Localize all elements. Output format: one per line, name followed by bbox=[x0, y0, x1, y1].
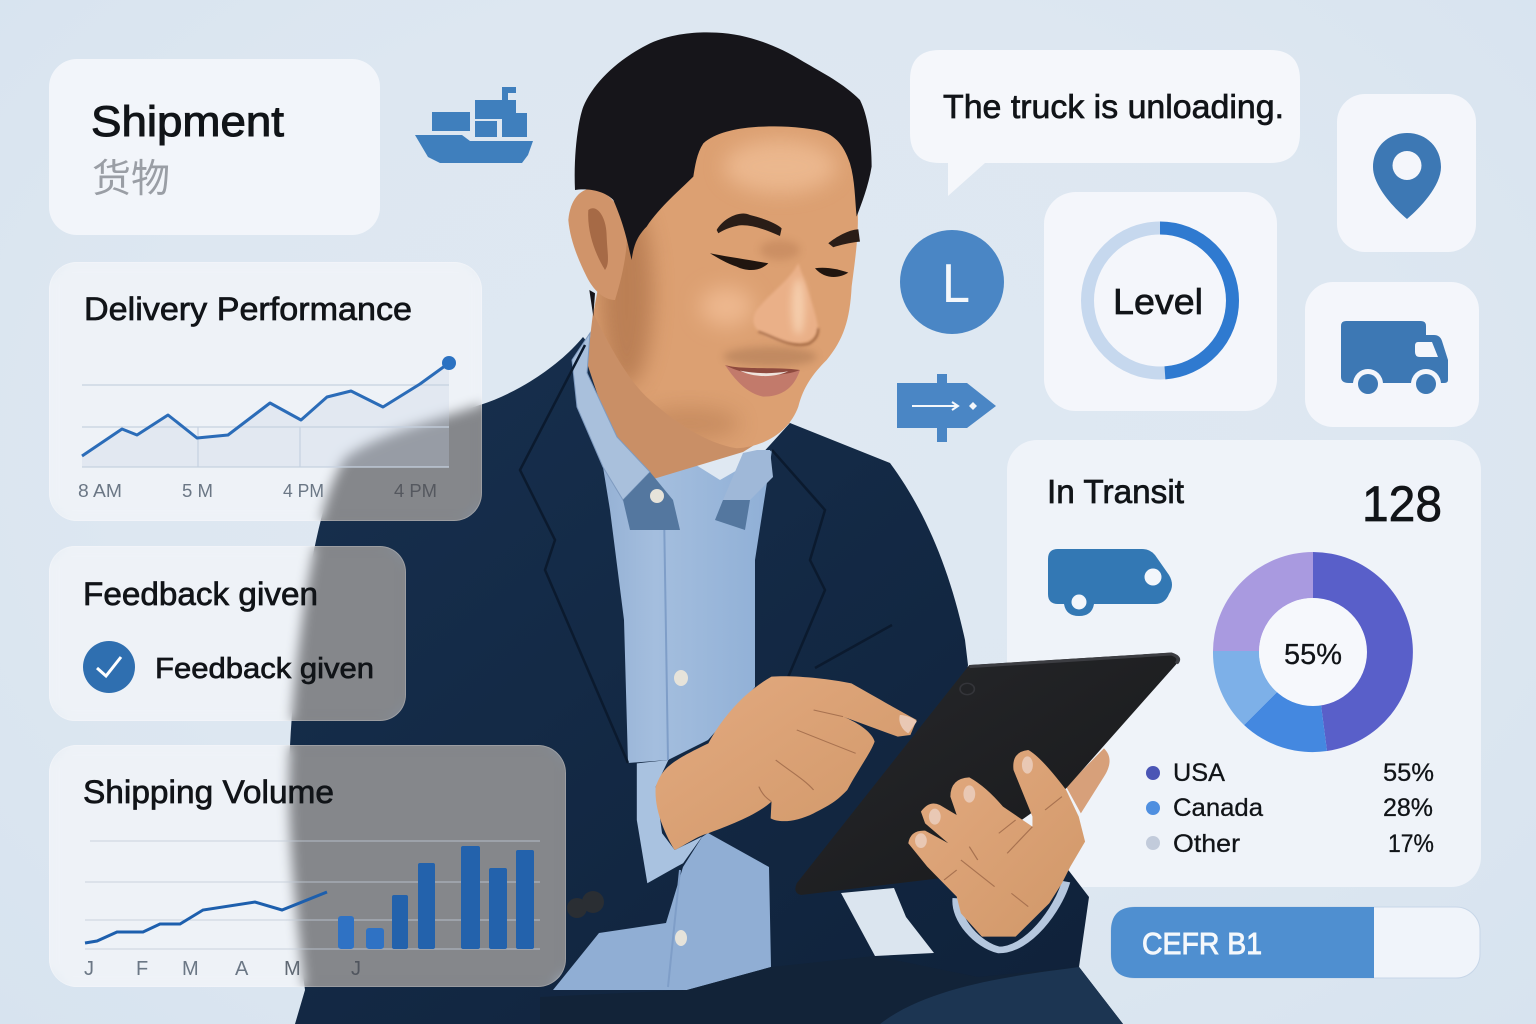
legend: Other bbox=[1173, 830, 1240, 858]
shirt placket bbox=[664, 510, 680, 987]
eyes bbox=[710, 253, 768, 270]
chart title: Delivery Performance bbox=[84, 291, 412, 327]
level text: Level bbox=[1113, 281, 1203, 322]
legend: 55% bbox=[1383, 759, 1434, 787]
month labels: M bbox=[182, 958, 199, 980]
panel: feedback given bbox=[49, 546, 406, 721]
speech text: The truck is unloading. bbox=[943, 88, 1284, 125]
sideburn below ear bbox=[589, 290, 595, 317]
legend: USA bbox=[1173, 759, 1225, 787]
bar chart bbox=[338, 846, 534, 949]
panel: shipping volume bbox=[49, 745, 566, 987]
month labels: A bbox=[235, 958, 249, 980]
in transit count: 128 bbox=[1362, 476, 1442, 532]
tablet bbox=[795, 653, 1179, 895]
panel: truck bbox=[1305, 282, 1479, 427]
volume title: Shipping Volume bbox=[83, 774, 334, 810]
axis labels: 4 PM bbox=[283, 481, 324, 501]
inner collar shadow bbox=[623, 472, 680, 530]
gap between jacket and arm bbox=[841, 888, 934, 956]
trousers bbox=[540, 956, 1123, 1024]
month labels: M bbox=[284, 958, 301, 980]
upper shirt bbox=[577, 407, 772, 763]
fingernails holding bbox=[915, 756, 1033, 848]
lapel edges bbox=[520, 345, 892, 763]
shipment title: Shipment bbox=[91, 98, 284, 146]
level ring bbox=[1088, 228, 1232, 373]
icon: tag truck bbox=[1048, 549, 1172, 616]
icon: delivery truck bbox=[1341, 321, 1448, 399]
collar left bbox=[572, 333, 650, 500]
thumb behind tablet bbox=[1066, 748, 1110, 813]
jacket seen through glass bbox=[287, 404, 566, 987]
left sleeve button bbox=[567, 891, 604, 918]
panel: shipment bbox=[49, 59, 380, 235]
in transit title: In Transit bbox=[1047, 473, 1184, 510]
mouth bbox=[725, 365, 800, 397]
finger creases bbox=[944, 797, 1062, 907]
collar right bbox=[723, 450, 773, 500]
left panel underlays bbox=[49, 262, 566, 987]
left cuff bbox=[637, 760, 702, 883]
ear bbox=[568, 188, 627, 300]
panel: location pin bbox=[1337, 94, 1476, 252]
progress bar: CEFR B1 bbox=[1111, 907, 1480, 978]
icon: signpost bbox=[897, 374, 996, 442]
lower shirt bbox=[553, 833, 771, 990]
chinese subtitle: 货物 bbox=[92, 158, 170, 201]
feedback heading: Feedback given bbox=[83, 576, 318, 612]
icon: letter L badge: L bbox=[942, 252, 970, 314]
feedback status: Feedback given bbox=[155, 653, 374, 685]
line chart bbox=[85, 892, 327, 943]
knuckle creases bbox=[759, 710, 856, 802]
icon: letter L badge bbox=[900, 230, 1004, 334]
panel: level bbox=[1044, 192, 1277, 411]
jacket bbox=[289, 337, 1123, 1024]
icon: cargo ship bbox=[415, 87, 533, 163]
axis labels bbox=[78, 481, 437, 501]
hands and tablet bbox=[637, 653, 1179, 950]
axis labels: 4 PM bbox=[394, 481, 437, 501]
progress bar: CEFR B1: CEFR B1 bbox=[1142, 926, 1262, 961]
head bbox=[568, 32, 872, 448]
legend: 17% bbox=[1388, 830, 1434, 858]
legend: Canada bbox=[1173, 794, 1263, 822]
hair bbox=[575, 32, 872, 260]
speech bubble bbox=[910, 50, 1300, 196]
donut centre value: 55% bbox=[1284, 639, 1342, 671]
month labels: J bbox=[84, 958, 94, 980]
donut chart bbox=[1213, 552, 1413, 752]
line chart bbox=[82, 356, 456, 467]
shirt buttons bbox=[650, 489, 688, 946]
eyebrows bbox=[717, 214, 782, 236]
nose underside bbox=[758, 328, 818, 345]
right cuff bbox=[957, 882, 1066, 950]
face bbox=[593, 120, 858, 448]
holding hand bbox=[908, 750, 1085, 937]
fingernail pointing bbox=[899, 715, 917, 733]
legend: 28% bbox=[1383, 794, 1433, 822]
neck bbox=[587, 313, 790, 480]
pointing hand bbox=[656, 676, 917, 850]
month labels: J bbox=[351, 958, 361, 980]
panel: delivery performance bbox=[49, 262, 482, 521]
legend bbox=[1146, 759, 1434, 858]
axis labels: 5 M bbox=[182, 481, 213, 501]
axis labels: 8 AM bbox=[78, 481, 122, 501]
month labels bbox=[84, 958, 361, 980]
panel: in transit bbox=[1007, 440, 1481, 887]
person bbox=[289, 32, 1179, 1024]
icon: check circle bbox=[83, 641, 135, 693]
month labels: F bbox=[136, 958, 148, 980]
gridlines bbox=[85, 841, 540, 949]
icon: map pin bbox=[1373, 133, 1441, 219]
